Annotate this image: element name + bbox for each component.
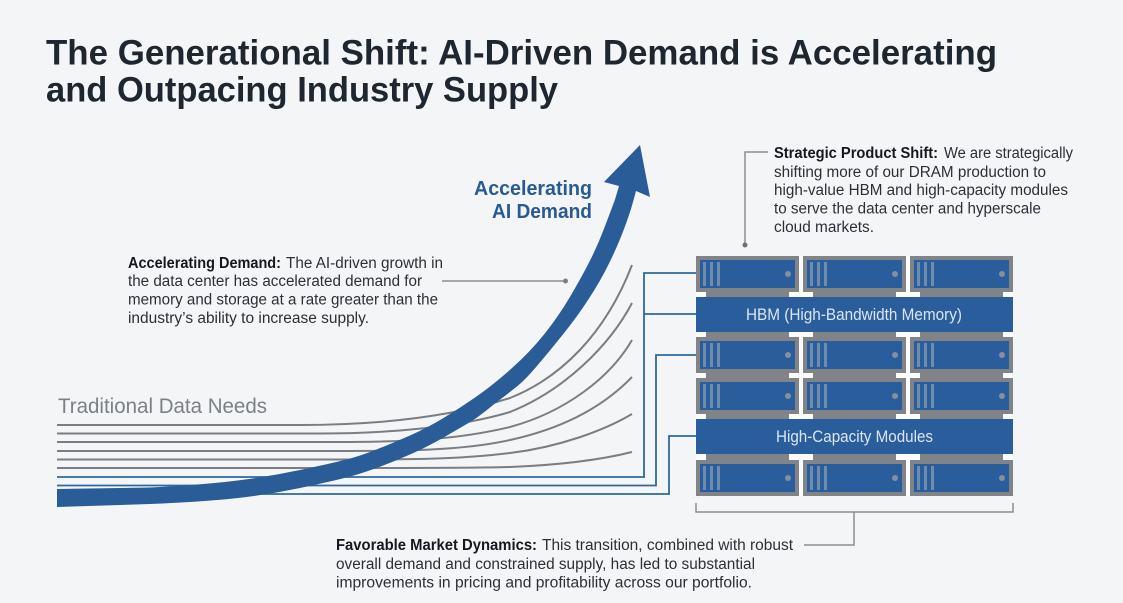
HBM bar: HBM (High-Bandwidth Memory) — [746, 306, 962, 324]
text block: accelerating demand: memory and storage at a rate greater than the — [128, 292, 438, 308]
text block: favorable market dynamics: overall demand and constrained supply, has led to substantial — [336, 556, 755, 573]
label: accelerating AI demand — [474, 178, 592, 223]
gray data lines — [57, 265, 632, 468]
server row 1 — [696, 256, 1013, 292]
text block: strategic product shift: Strategic Product Shift: — [774, 145, 938, 162]
text block: strategic product shift: cloud markets. — [774, 219, 874, 236]
leader: strategic product shift — [742, 152, 768, 248]
text block: strategic product shift: to serve the data center and hyperscale — [774, 200, 1041, 218]
server stack — [696, 256, 1013, 496]
high-capacity modules bar — [696, 419, 1013, 454]
bracket under server stack — [696, 503, 1013, 545]
server row 3 — [696, 378, 1013, 414]
text block: favorable market dynamics: This transition, combined with robust — [542, 537, 794, 554]
leader: accelerating demand — [442, 278, 568, 284]
connecting strips — [706, 292, 1003, 460]
text block: strategic product shift: We are strategically — [944, 145, 1073, 162]
label: traditional data needs: Traditional Data Needs — [58, 395, 267, 418]
HBM bar — [696, 297, 1013, 332]
title: The Generational Shift: AI-Driven Demand is Accelerating — [46, 34, 997, 72]
text block: accelerating demand: The AI-driven growth in — [286, 255, 443, 272]
text block: strategic product shift: high-value HBM and high-capacity modules — [774, 182, 1068, 199]
title: and Outpacing Industry Supply — [46, 70, 559, 110]
text block: accelerating demand: Accelerating Demand: — [128, 255, 281, 272]
blue connector lines — [57, 273, 696, 494]
text block: favorable market dynamics: Favorable Market Dynamics: — [336, 537, 537, 554]
server row 2 — [696, 337, 1013, 373]
server row 4 — [696, 460, 1013, 496]
text block: favorable market dynamics: improvements in pricing and profitability across our portfolio. — [336, 574, 752, 592]
text block: accelerating demand: industry’s ability to increase supply. — [128, 310, 369, 327]
text block: accelerating demand — [128, 255, 443, 327]
text block: strategic product shift: shifting more of our DRAM production to — [774, 164, 1046, 181]
arrow: accelerating AI demand — [57, 145, 650, 507]
text block: favorable market dynamics — [336, 537, 794, 592]
label: accelerating AI demand: Accelerating — [474, 178, 592, 200]
label: accelerating AI demand: AI Demand — [492, 201, 592, 223]
text block: accelerating demand: the data center has accelerated demand for — [128, 273, 422, 290]
title — [46, 34, 997, 110]
high-capacity modules bar: High-Capacity Modules — [776, 428, 933, 446]
text block: strategic product shift — [774, 145, 1073, 236]
